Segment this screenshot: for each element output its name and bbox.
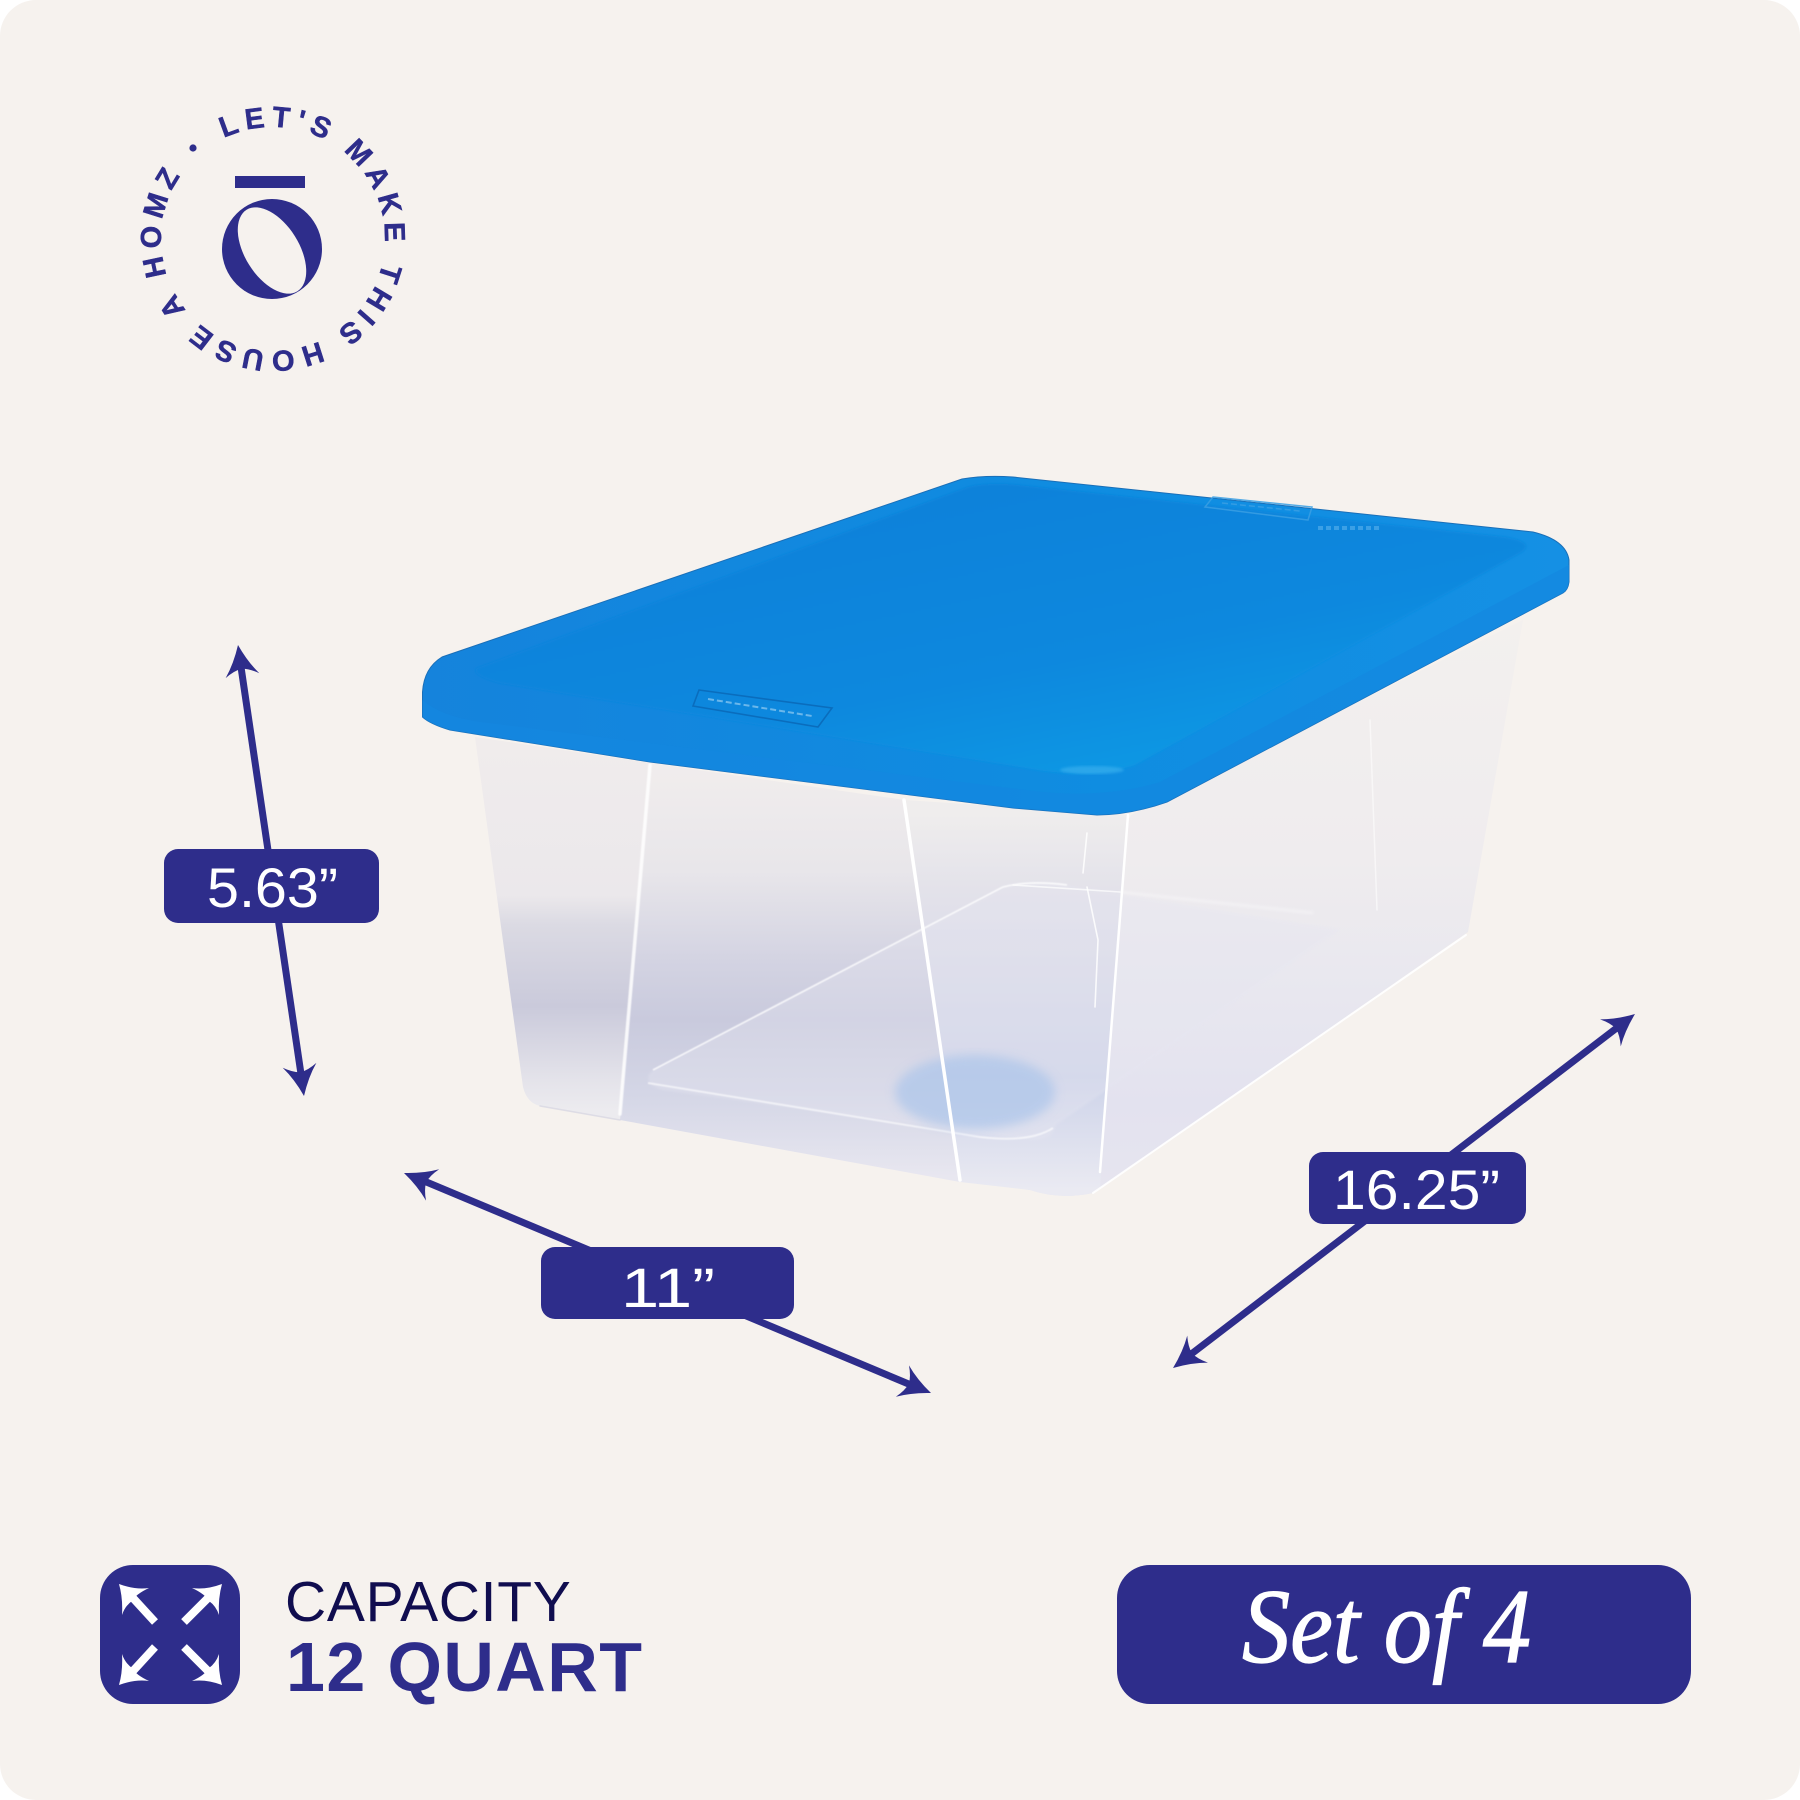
width arrow bbox=[397, 1157, 938, 1409]
capacity label: CAPACITY bbox=[285, 1570, 571, 1634]
lid corner highlight bbox=[1060, 766, 1124, 774]
height dimension 5.63 bbox=[164, 643, 379, 1098]
logo macron bar bbox=[235, 176, 305, 188]
box edge highlights bbox=[540, 720, 1466, 1193]
lid small mould mark bbox=[1318, 526, 1380, 530]
height label: 5.63” bbox=[207, 856, 338, 919]
logo ring dot bbox=[189, 144, 197, 152]
width label bbox=[541, 1247, 794, 1319]
logo letter o bbox=[222, 195, 322, 306]
capacity value: 12 QUART bbox=[286, 1628, 643, 1706]
length dimension 16.25 bbox=[1163, 1001, 1645, 1381]
box floor tray bbox=[648, 882, 1340, 1140]
set of 4 badge bbox=[1117, 1565, 1691, 1704]
icon: expand arrows bbox=[100, 1565, 240, 1704]
box lid bbox=[422, 476, 1569, 815]
box body bbox=[475, 620, 1523, 1196]
width label: 11” bbox=[621, 1256, 715, 1319]
lid embossed label front bbox=[693, 690, 832, 727]
height arrow bbox=[221, 643, 321, 1098]
lid recessed top bbox=[476, 484, 1526, 773]
logo ring text: LET'S MAKE THIS HOUSE A HOMZ bbox=[140, 106, 406, 372]
length label: 16.25” bbox=[1333, 1158, 1500, 1221]
lid embossed label back bbox=[1205, 497, 1312, 520]
length label bbox=[1309, 1152, 1526, 1224]
logo badge bbox=[140, 106, 406, 372]
set of 4 badge: Set of 4 bbox=[1242, 1568, 1531, 1685]
storage box photo bbox=[422, 476, 1569, 1196]
height label bbox=[164, 849, 379, 923]
capacity block bbox=[100, 1565, 643, 1706]
lid front lip shade bbox=[422, 565, 1569, 815]
length arrow bbox=[1163, 1001, 1645, 1381]
width dimension 11 bbox=[397, 1157, 938, 1409]
